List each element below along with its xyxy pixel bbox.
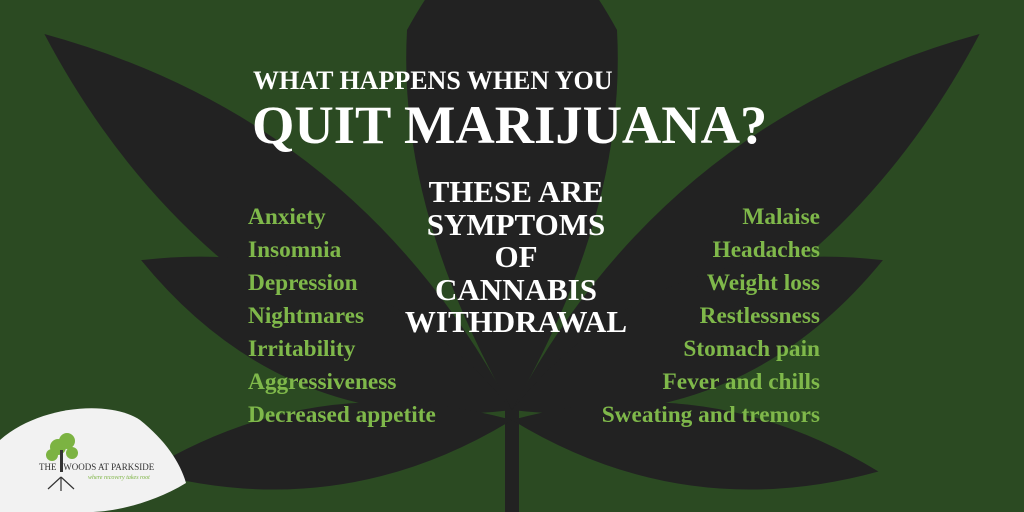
right symptoms list: Restlessness: [700, 303, 820, 329]
center text block: THESE ARE: [429, 174, 603, 209]
left symptoms list: Decreased appetite: [248, 402, 436, 428]
left symptoms list: Depression: [248, 270, 358, 296]
right symptoms list: Headaches: [713, 237, 820, 263]
left symptoms list: [248, 204, 436, 428]
left symptoms list: Irritability: [248, 336, 355, 362]
left symptoms list: Aggressiveness: [248, 369, 396, 395]
logo: where recovery takes root: [88, 475, 150, 481]
right symptoms list: Malaise: [742, 204, 820, 230]
center text block: OF: [494, 239, 538, 274]
main heading: QUIT MARIJUANA?: [252, 94, 767, 155]
right symptoms list: [602, 204, 820, 428]
right symptoms list: Weight loss: [707, 270, 820, 296]
left symptoms list: Nightmares: [248, 303, 364, 329]
logo: THE WOODS AT PARKSIDE: [39, 462, 154, 472]
right symptoms list: Sweating and tremors: [602, 402, 820, 428]
left symptoms list: Insomnia: [248, 237, 341, 263]
center text block: WITHDRAWAL: [405, 304, 627, 339]
logo: [0, 408, 186, 512]
center text block: CANNABIS: [435, 272, 597, 306]
right symptoms list: Fever and chills: [663, 369, 820, 395]
left symptoms list: Anxiety: [248, 204, 326, 230]
center text block: [405, 174, 627, 339]
right symptoms list: Stomach pain: [683, 336, 820, 362]
center text block: SYMPTOMS: [427, 206, 605, 242]
title: WHAT HAPPENS WHEN YOU: [253, 66, 612, 95]
